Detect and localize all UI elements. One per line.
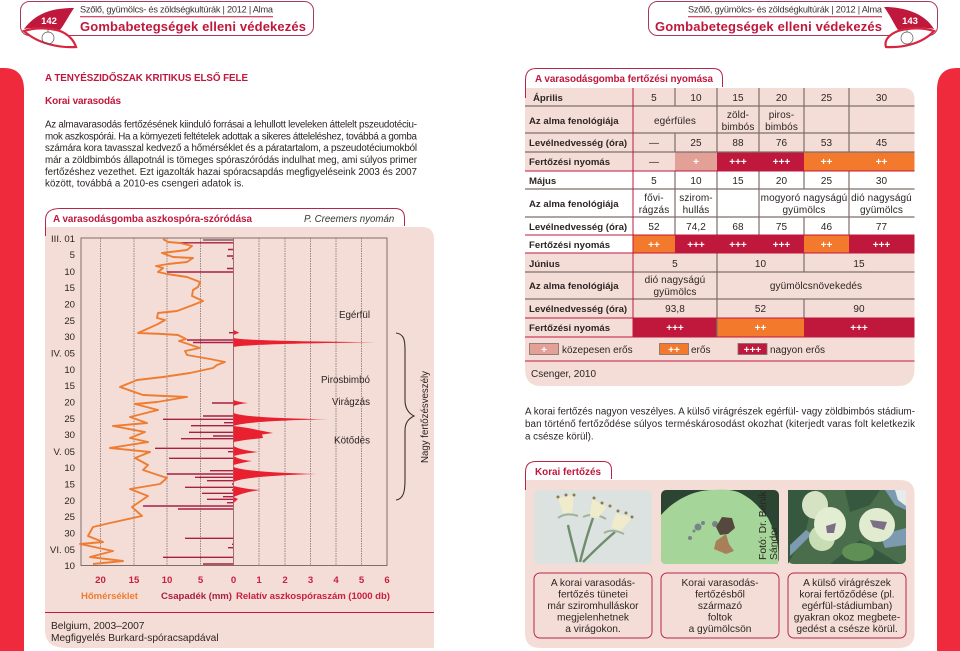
x axis labels: 2 xyxy=(282,575,288,586)
x axis labels: 5 xyxy=(359,575,365,586)
June rows: 93,8 xyxy=(665,304,685,315)
legend: közepesen erős xyxy=(562,345,633,356)
May rows: 77 xyxy=(876,222,887,233)
April rows: 10 xyxy=(690,93,702,104)
April rows: — xyxy=(649,138,659,149)
table source: Csenger, 2010 xyxy=(531,369,596,380)
y axis labels: 25 xyxy=(64,512,75,523)
x axis labels: 6 xyxy=(384,575,390,586)
chart heading: A varasodásgomba aszkospóra-szóródása xyxy=(53,214,252,225)
phenology labels: Virágzás xyxy=(332,397,370,408)
photo: scabbed fruit xyxy=(661,490,780,564)
May rows: +++ xyxy=(773,240,790,251)
photo: blossoms xyxy=(534,490,652,564)
photo: apples on tree xyxy=(788,490,906,564)
x axis labels: 1 xyxy=(256,575,262,586)
legend: +++ xyxy=(744,345,761,356)
April rows: 20 xyxy=(776,93,787,104)
right side tab xyxy=(937,68,960,651)
legend: + xyxy=(541,345,547,356)
paragraph: early infection: a csésze körül). xyxy=(525,432,594,442)
caption 2: a gyümölcsön xyxy=(689,624,751,635)
icon: apple in leaf xyxy=(24,28,76,47)
May rows: szirom- xyxy=(679,193,713,204)
caption 1: fertőzés tünetei xyxy=(558,590,628,600)
June rows: +++ xyxy=(850,323,868,334)
April rows: zöld- xyxy=(727,110,749,121)
phenology labels: Pirosbimbó xyxy=(321,375,371,386)
May rows: hullás xyxy=(683,205,709,216)
body text: már a zöldbimbós állapotnál is tömeges spóraszóródás indulhat meg, ami súlyos primer xyxy=(45,155,418,166)
April rows: 5 xyxy=(651,93,657,104)
May rows: ++ xyxy=(821,240,832,251)
June rows: dió nagyságú xyxy=(645,275,705,286)
y axis labels: 15 xyxy=(64,480,75,490)
y axis labels: 10 xyxy=(64,561,75,572)
April rows: 15 xyxy=(732,93,744,104)
June rows: 5 xyxy=(672,259,678,270)
May rows: mogyoró nagyságú xyxy=(761,193,847,204)
panel: ascospore chart xyxy=(45,208,434,648)
May rows: Fertőzési nyomás xyxy=(529,240,610,251)
caption 1: A korai varasodás- xyxy=(551,578,635,589)
May rows: Május xyxy=(529,176,556,187)
April rows: Április xyxy=(533,92,563,104)
subheading: Korai varasodás xyxy=(45,96,121,107)
phenology labels: Kötődés xyxy=(334,436,370,446)
precipitation bars xyxy=(143,240,233,564)
April rows: ++ xyxy=(821,157,832,168)
y axis labels: 30 xyxy=(64,528,75,540)
y axis labels: 20 xyxy=(64,496,75,507)
body text: között, továbbá a 2010-es csengeri adatok is. xyxy=(45,178,244,190)
x axis labels: 0 xyxy=(231,575,236,586)
May rows: 74,2 xyxy=(686,222,706,233)
running head left: Szőlő, gyümölcs- és zöldségkultúrák | 2012 | Alma xyxy=(80,4,274,14)
May rows: ++ xyxy=(648,240,660,251)
left page header xyxy=(20,2,314,47)
legend: ++ xyxy=(668,345,680,356)
April rows: 88 xyxy=(732,138,744,149)
right page header xyxy=(648,2,938,47)
axis titles: Relatív aszkospóraszám (1000 db) xyxy=(236,591,390,602)
April rows xyxy=(529,92,887,168)
May rows: 10 xyxy=(690,176,702,187)
axis titles: Hőmérséklet xyxy=(81,591,139,602)
legend: nagyon erős xyxy=(770,345,825,356)
April rows: egérfüles xyxy=(654,116,696,127)
April rows: Levélnedvesség (óra) xyxy=(529,138,627,149)
June rows: Az alma fenológiája xyxy=(529,281,619,292)
May rows: fővi- xyxy=(644,193,664,204)
May rows: 15 xyxy=(732,176,744,187)
y axis labels: 15 xyxy=(64,381,75,392)
caption 3 xyxy=(788,573,906,638)
June rows: gyümölcsnövekedés xyxy=(770,281,862,292)
April rows: — xyxy=(649,157,659,168)
temperature line xyxy=(80,239,225,564)
June rows: 10 xyxy=(755,259,766,270)
April rows: piros- xyxy=(769,110,794,121)
June rows: Levélnedvesség (óra) xyxy=(529,304,627,315)
section heading: A TENYÉSZIDŐSZAK KRITIKUS ELSŐ FELE xyxy=(45,72,248,84)
April rows: + xyxy=(693,157,699,168)
x axis labels: 15 xyxy=(129,575,140,586)
body text: mok aszkospórái. Ha a környezeti feltételek adottak a sikeres átteleléshez, továbbá a gomba xyxy=(45,132,418,142)
table heading: A varasodásgomba fertőzési nyomása xyxy=(535,74,714,85)
caption 2: fertőzésből xyxy=(695,590,745,600)
April rows: 45 xyxy=(876,138,887,149)
May rows: Levélnedvesség (óra) xyxy=(529,222,627,233)
title left: Gombabetegségek elleni védekezés xyxy=(80,19,306,34)
bracket xyxy=(396,333,414,500)
left side tab xyxy=(0,68,24,651)
May rows: 20 xyxy=(776,176,787,187)
y axis labels: V. 05 xyxy=(53,447,75,458)
caption 3: gedést a csésze körül. xyxy=(796,624,898,635)
x axis labels: 20 xyxy=(95,575,106,586)
April rows: 53 xyxy=(821,138,832,149)
photo credit: Fotó: Dr. Bénik xyxy=(758,490,769,560)
April rows: Fertőzési nyomás xyxy=(529,157,610,168)
body text: Az almavarasodás fertőzésének kiinduló forrásai a lehullott leveleken áttelelt pszeudotéciu- xyxy=(45,120,417,130)
May rows: 68 xyxy=(732,222,744,233)
panel: infection pressure table xyxy=(525,68,914,386)
May rows: dió nagyságú xyxy=(851,193,912,204)
June rows: 15 xyxy=(853,259,865,270)
phenology labels xyxy=(321,310,371,446)
caption 2: származó xyxy=(698,601,742,612)
caption 1: már sziromhulláskor xyxy=(547,601,639,612)
body text xyxy=(45,120,418,190)
x axis labels xyxy=(95,575,390,586)
June rows xyxy=(529,259,868,334)
chart plot xyxy=(80,238,387,566)
April rows: 30 xyxy=(876,93,887,104)
white May rows xyxy=(525,171,914,235)
y axis labels: 10 xyxy=(64,463,75,474)
April rows: ++ xyxy=(876,157,887,168)
April rows: 76 xyxy=(776,138,787,149)
page number badge 143 xyxy=(884,7,934,30)
y axis labels: 10 xyxy=(64,267,75,278)
photo: scabbed fruit: Sándor xyxy=(769,526,780,560)
page number badge 143: 143 xyxy=(902,16,918,27)
June rows: ++ xyxy=(755,323,766,334)
May rows: 52 xyxy=(648,222,660,233)
caption 2: foltok xyxy=(708,612,733,624)
table grid xyxy=(525,88,914,337)
y axis labels: 25 xyxy=(64,414,75,425)
icon: apple in leaf xyxy=(886,28,934,47)
paragraph: early infection: ban történő fertőződése súlyos terméskárosodást okozhat (kiterjedt varas folt keletkezik xyxy=(525,419,915,430)
x axis labels: 5 xyxy=(198,575,204,586)
April rows: Az alma fenológiája xyxy=(529,116,619,127)
caption 1: a virágokon. xyxy=(565,624,621,635)
x axis labels: 10 xyxy=(162,575,172,586)
caption 3: egérfül-stádiumban) xyxy=(802,601,892,612)
infection cells xyxy=(633,152,914,337)
May rows: 5 xyxy=(651,176,657,187)
rotated label: Nagy fertőzésveszély xyxy=(420,371,431,463)
May rows: 30 xyxy=(876,176,887,187)
May rows: 25 xyxy=(821,176,832,187)
panel: ascospore chart: Megfigyelés Burkard-spóracsapdával xyxy=(51,633,219,644)
April rows: 25 xyxy=(821,93,832,104)
April rows: bimbós xyxy=(722,122,754,133)
May rows: 46 xyxy=(821,222,832,233)
May rows: rágzás xyxy=(639,205,669,216)
caption 1: megjelenhetnek xyxy=(557,612,630,624)
May rows: +++ xyxy=(873,240,890,251)
page number badge 142: 142 xyxy=(41,16,57,27)
chart note: Belgium, 2003–2007 xyxy=(51,621,145,632)
May rows xyxy=(529,176,912,251)
June rows: gyümölcs xyxy=(653,287,697,298)
y axis labels: IV. 05 xyxy=(51,348,75,360)
legend: erős xyxy=(691,345,710,356)
caption 2: Korai varasodás- xyxy=(681,578,759,589)
y axis labels: III. 01 xyxy=(51,234,75,245)
y axis labels: 10 xyxy=(64,365,75,376)
phenology labels: Egérfül xyxy=(339,310,370,321)
June rows: 90 xyxy=(853,304,865,315)
paragraph: early infection: A korai fertőzés nagyon veszélyes. A külső virágrészek egérfül- vagy zöldbimbós stádium- xyxy=(525,406,915,418)
title right: Gombabetegségek elleni védekezés xyxy=(655,19,882,34)
x axis labels: 3 xyxy=(308,575,313,586)
April rows: bimbós xyxy=(765,122,798,133)
June rows: +++ xyxy=(666,323,684,334)
source note: P. Creemers nyomán xyxy=(304,214,394,225)
y axis labels: 25 xyxy=(64,316,75,327)
legend xyxy=(530,344,825,356)
April rows: +++ xyxy=(729,157,747,168)
caption 3: korai fertőződése (pl. xyxy=(799,590,895,600)
y axis labels: 30 xyxy=(64,430,75,441)
caption 1 xyxy=(534,573,652,638)
spore count peaks xyxy=(234,330,376,503)
April rows: 25 xyxy=(690,138,702,149)
y axis labels: 15 xyxy=(64,283,75,294)
body text: fertőzéshez vezethet. Ezt igazolták hazai spóracsapdás megfigyeléseink 2003 és 2007 xyxy=(45,167,417,178)
May rows: +++ xyxy=(729,240,747,251)
page number badge 142 xyxy=(24,8,74,30)
May rows: +++ xyxy=(687,240,705,251)
axis titles: Csapadék (mm) xyxy=(161,591,232,602)
y axis labels xyxy=(50,234,75,572)
paragraph: early infection xyxy=(525,406,915,442)
running head right: Szőlő, gyümölcs- és zöldségkultúrák | 2012 | Alma xyxy=(688,4,883,14)
May rows: gyümölcs xyxy=(860,205,903,216)
May rows: Az alma fenológiája xyxy=(529,199,619,210)
May rows: gyümölcs xyxy=(782,205,826,216)
April rows: +++ xyxy=(773,157,790,168)
caption 2 xyxy=(661,573,779,638)
y axis labels: VI. 05 xyxy=(50,545,75,556)
caption 3: A külső virágrészek xyxy=(803,578,892,589)
y axis labels: 5 xyxy=(70,250,75,261)
June rows: Június xyxy=(529,259,560,270)
body text: számára kora tavasszal kedvező a hőmérséklet és a páratartalom, a pszeudotéciumokból xyxy=(45,143,417,154)
y axis labels: 20 xyxy=(64,300,75,310)
June rows: 52 xyxy=(755,304,766,315)
y axis labels: 20 xyxy=(64,398,75,408)
axis titles xyxy=(81,591,390,602)
panel: early infection photos xyxy=(525,462,914,648)
June rows: Fertőzési nyomás xyxy=(529,323,610,334)
caption 3: gyakran okoz megbete- xyxy=(794,612,900,624)
x axis labels: 4 xyxy=(333,575,339,586)
May rows: 75 xyxy=(776,222,787,233)
panel heading: Korai fertőzés xyxy=(535,467,602,478)
y axis labels: 30 xyxy=(64,332,75,343)
